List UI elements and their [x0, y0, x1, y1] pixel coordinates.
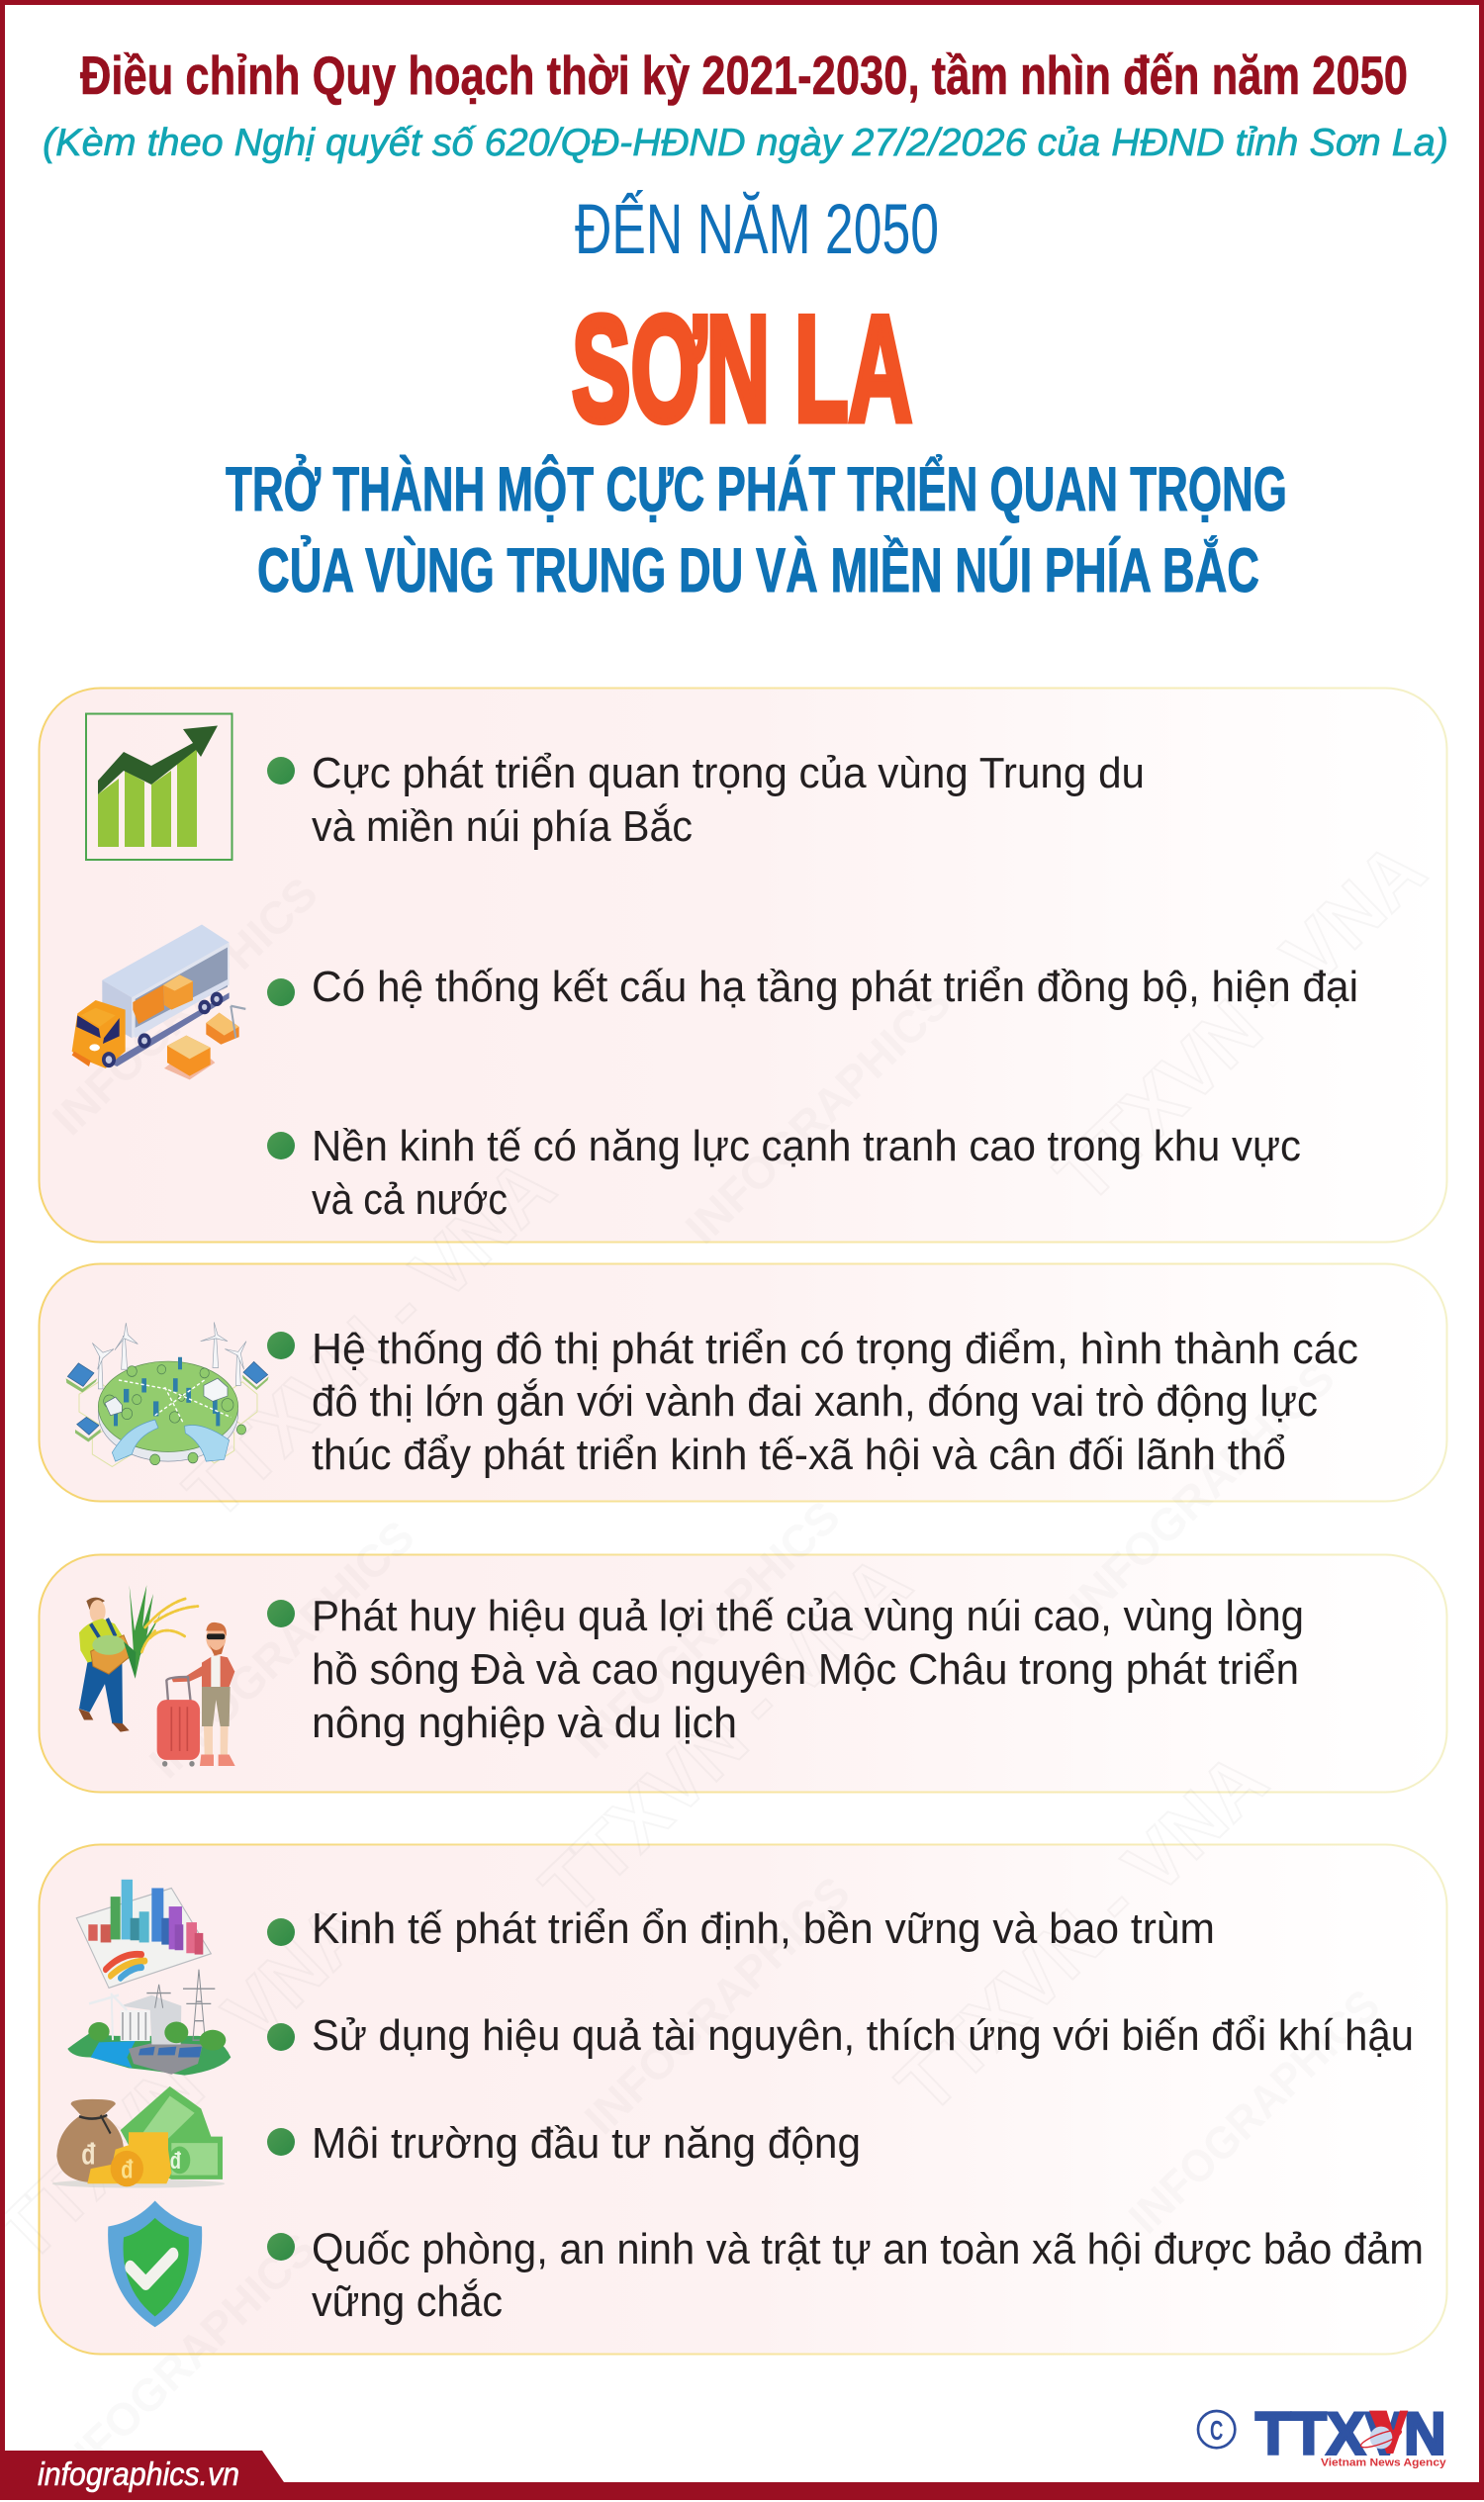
heading: Son La: SƠN LA	[572, 285, 912, 453]
text block: panel 2: Hệ thống đô thị phát triển có trọng điểm, hình thành các	[312, 1325, 1358, 1373]
bullets: green dots	[267, 757, 295, 2261]
text block: panel 1: Cực phát triển quan trọng của vùng Trung du	[312, 749, 1145, 797]
text block: panel 1: Nền kinh tế có năng lực cạnh tranh cao trong khu vực	[312, 1122, 1301, 1170]
text block: panel 1: và miền núi phía Bắc	[312, 802, 693, 851]
text block: panel 4: Kinh tế phát triển ổn định, bền vững và bao trùm	[312, 1904, 1215, 1953]
logo: TTXVN: TTXVN	[1255, 2399, 1446, 2466]
footer tab: infographics.vn	[38, 2456, 239, 2492]
logo: TTXVN: C	[1210, 2415, 1223, 2446]
watermark: TTXVN - VNA	[1039, 826, 1441, 1219]
text block: panel 1: Có hệ thống kết cấu hạ tầng phát triển đồng bộ, hiện đại	[312, 963, 1358, 1011]
text block: panel 3: Phát huy hiệu quả lợi thế của vùng núi cao, vùng lòng	[312, 1592, 1304, 1640]
text block: panel 2: đô thị lớn gắn với vành đai xanh, đóng vai trò động lực	[312, 1377, 1318, 1426]
icon: growth chart	[86, 714, 232, 860]
text block: panel 2: thúc đẩy phát triển kinh tế-xã hội và cân đối lãnh thổ	[312, 1431, 1286, 1479]
watermark: TTXVN - VNA	[881, 1736, 1283, 2129]
text block: panel 1: và cả nước	[312, 1175, 508, 1224]
watermark: INFOGRAPHICS	[1060, 1352, 1345, 1629]
watermark: INFOGRAPHICS	[43, 868, 327, 1145]
watermark: INFOGRAPHICS	[41, 2223, 325, 2500]
watermark: INFOGRAPHICS	[676, 976, 961, 1253]
text block: panel 2	[312, 1325, 1358, 1479]
icon: shield	[108, 2201, 202, 2327]
heading: by 2050: ĐẾN NĂM 2050	[575, 191, 939, 269]
panel: agriculture and tourism	[40, 1555, 1446, 1793]
text block: panel 3: hồ sông Đà và cao nguyên Mộc Châu trong phát triển	[312, 1645, 1299, 1694]
panel: economy, resources, investment, security	[40, 1844, 1446, 2355]
icon: money: đ	[81, 2138, 96, 2171]
icon: delivery truck	[72, 924, 245, 1079]
icon: money: đ	[121, 2155, 134, 2183]
panel: urban system	[40, 1264, 1446, 1502]
text block: panel 4: Môi trường đầu tư năng động	[312, 2119, 861, 2168]
watermark: INFOGRAPHICS	[1119, 1980, 1389, 2243]
watermark: TTXVN - VNA	[168, 1143, 571, 1535]
logo: TTXVN: Vietnam News Agency	[1321, 2456, 1446, 2468]
icon: money	[52, 2086, 225, 2188]
watermark: TTXVN - VNA	[524, 1538, 927, 1931]
text block: panel 4: vững chắc	[312, 2277, 503, 2326]
watermark	[0, 826, 1441, 2500]
subtitle: (Kèm theo Nghị quyết số 620/QĐ-HĐND ngày 27/2/2026 của HĐND tỉnh Sơn La)	[43, 122, 1448, 164]
watermark: INFOGRAPHICS	[575, 1867, 860, 2144]
text block: panel 4	[312, 1904, 1424, 2326]
text block: panel 1	[312, 749, 1358, 1224]
watermark: INFOGRAPHICS	[565, 1491, 850, 1768]
text block: panel 4: Sử dụng hiệu quả tài nguyên, thích ứng với biến đổi khí hậu	[312, 2011, 1414, 2060]
icon: power plant	[67, 1970, 231, 2076]
icon: farmer and tourist	[78, 1585, 235, 1767]
icon: green city	[66, 1322, 269, 1466]
footer tab	[0, 2451, 284, 2492]
text block: panel 4: Quốc phòng, an ninh và trật tự an toàn xã hội được bảo đảm	[312, 2225, 1424, 2273]
panel: development pole	[40, 689, 1446, 1243]
text block: panel 3: nông nghiệp và du lịch	[312, 1699, 737, 1747]
icon: 3D statistics	[76, 1880, 211, 1988]
text block: panel 3	[312, 1592, 1304, 1747]
icon: money: đ	[170, 2148, 181, 2175]
watermark: INFOGRAPHICS	[139, 1511, 424, 1788]
